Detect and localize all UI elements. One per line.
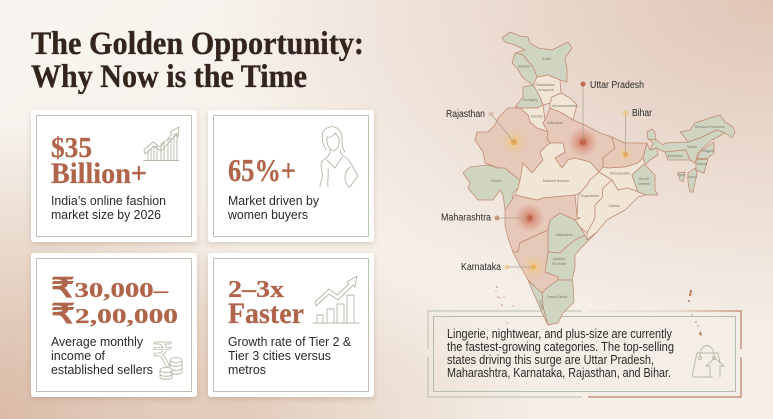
region: Rajasthan — [475, 108, 550, 180]
callout: Bihar — [618, 108, 653, 162]
description: established sellers — [51, 363, 153, 377]
region: Madhya Pradesh — [515, 143, 599, 200]
region: Jharkhand — [599, 158, 645, 192]
state name labels: Teeleon — [638, 182, 650, 186]
region: Odisha — [587, 180, 646, 240]
state name labels — [490, 57, 725, 310]
region: Assam — [648, 130, 725, 163]
description — [51, 335, 153, 377]
state name labels: Akkoratrea — [555, 233, 573, 237]
stat: $35 Billion+: $35 — [51, 133, 92, 164]
state name labels: Bs util — [639, 177, 649, 181]
callout text: Lingerie, nightwear, and plus-size are currently — [447, 327, 673, 341]
region: Tamil Nadu — [542, 280, 574, 325]
stat: income range: ₹ 30,000– — [51, 273, 169, 303]
region: Nagaland — [697, 142, 714, 159]
state name labels: Bunsond Rosmme — [695, 125, 725, 129]
callout text: the fastest-growing categories. The top-selling — [447, 340, 674, 354]
icon: rupee and coins: ₹ — [152, 336, 173, 373]
description: women buyers — [227, 208, 308, 222]
panel: market size — [31, 110, 197, 242]
region: Uttar Pradesh — [543, 108, 615, 172]
region: Tripura — [678, 172, 685, 182]
description: Average monthly — [51, 335, 144, 349]
region: Sikkim — [647, 129, 656, 140]
state name labels: Uhnaassankhas — [552, 104, 578, 108]
callout: Rajasthan — [446, 109, 527, 155]
state name labels: Rognddslor — [581, 194, 600, 198]
stat: income range: ₹ 2,00,000 — [51, 299, 178, 329]
icon: rupee and coins — [152, 336, 182, 379]
region: West Bengal — [632, 143, 658, 195]
state name labels: Shoritol — [530, 114, 543, 118]
region: Arunachal Pradesh — [680, 115, 735, 142]
description — [51, 194, 166, 222]
state name labels: Sbaddartian — [535, 83, 555, 87]
region: Telangana — [548, 213, 585, 253]
panel: insight callout — [428, 311, 741, 397]
description: Tier 3 cities versus — [228, 349, 331, 363]
stat: 2-3x Faster — [228, 277, 304, 330]
title: The Golden Opportunity: — [31, 26, 364, 62]
title: Why Now is the Time — [31, 59, 307, 95]
state name labels: Maadid — [553, 257, 565, 261]
state name labels: Ndta stow — [547, 121, 563, 125]
region: Karnataka — [513, 230, 558, 293]
description: metros — [228, 363, 266, 377]
region: Chhattisgarh — [575, 172, 612, 233]
region: Andhra Pradesh — [545, 232, 597, 280]
state name labels: Anoppore — [538, 88, 554, 92]
description: Growth rate of Tier 2 & — [228, 335, 352, 349]
stat: 65%+: 65%+ — [228, 152, 296, 188]
region: Uttarakhand — [550, 93, 577, 120]
callout text: states driving this surge are Uttar Pradesh, — [447, 353, 654, 367]
icon: growth bars with arrow — [313, 276, 359, 323]
description: India’s online fashion — [51, 194, 166, 208]
description: Market driven by — [228, 194, 320, 208]
state name labels: Rochule — [552, 262, 566, 266]
state name labels: Yaoor Eathol — [547, 295, 567, 299]
region: Maharashtra — [505, 195, 580, 252]
panel: tier 2 and 3 growth — [208, 253, 374, 397]
region: Jammu — [512, 53, 537, 85]
panel: seller income — [31, 253, 197, 397]
title — [31, 26, 364, 95]
stat: income range — [51, 273, 178, 329]
state name labels: Nagpur — [702, 149, 715, 153]
state name labels: Madeed Beshan — [543, 179, 569, 183]
state name labels: Soobtor — [518, 64, 531, 68]
icon: shopping bag with arrow — [692, 346, 724, 377]
region: Ladakh — [502, 32, 572, 82]
callout text — [447, 327, 674, 380]
state name labels: Naptla — [697, 162, 707, 166]
stat: $35 Billion+ — [51, 133, 147, 190]
state name labels: Odorre — [490, 179, 502, 183]
icon: woman outline — [320, 127, 358, 187]
stat: $35 Billion+: Billion+ — [51, 157, 147, 190]
callout: Karnataka — [461, 255, 546, 279]
region: Manipur — [696, 159, 708, 173]
state name labels: Wartu — [687, 145, 697, 149]
state name labels: Napra — [687, 175, 697, 179]
stat: 2-3x Faster: 2–3x — [228, 277, 284, 303]
region: Mizoram — [688, 168, 697, 192]
islands: Andaman and Nicobar — [688, 290, 702, 336]
region: Himachal — [533, 75, 561, 105]
description: market size by 2026 — [51, 208, 161, 222]
islands: Lakshadweep — [495, 286, 514, 324]
region: Punjab — [515, 85, 543, 108]
callout text: Maharashtra, Karnataka, Rajasthan, and Bihar. — [447, 366, 671, 380]
callout: Uttar Pradesh: Uttar Pradesh — [590, 80, 644, 91]
callout: Maharashtra: Maharashtra — [441, 212, 491, 224]
callout: Rajasthan: Rajasthan — [446, 109, 485, 120]
map of India — [463, 32, 735, 336]
callout: Uttar Pradesh — [569, 80, 644, 156]
region: Gujarat — [463, 165, 520, 209]
state name labels: Odaoa — [609, 204, 619, 208]
icon: rising bar chart — [144, 127, 179, 160]
region: Meghalaya — [665, 150, 690, 160]
region: Bihar — [603, 137, 647, 168]
state name labels: Ammsold — [668, 154, 682, 158]
description: income of — [51, 349, 106, 363]
stat: 2-3x Faster: Faster — [228, 297, 304, 330]
state name labels: Oluoa — [537, 299, 544, 310]
description — [228, 335, 352, 377]
callout: Maharashtra — [441, 204, 544, 232]
description — [227, 194, 320, 222]
state name labels: Rpra — [677, 173, 685, 177]
callout: Bihar: Bihar — [632, 108, 653, 119]
panel: women buyers — [208, 110, 374, 242]
callout: Karnataka: Karnataka — [461, 262, 501, 273]
state name labels: Hoorgary — [523, 98, 538, 102]
region: Kerala — [528, 280, 548, 325]
state name labels: Ahnadaustia — [610, 172, 630, 176]
state name labels: Ardid — [542, 57, 551, 61]
region: Haryana — [520, 105, 548, 132]
